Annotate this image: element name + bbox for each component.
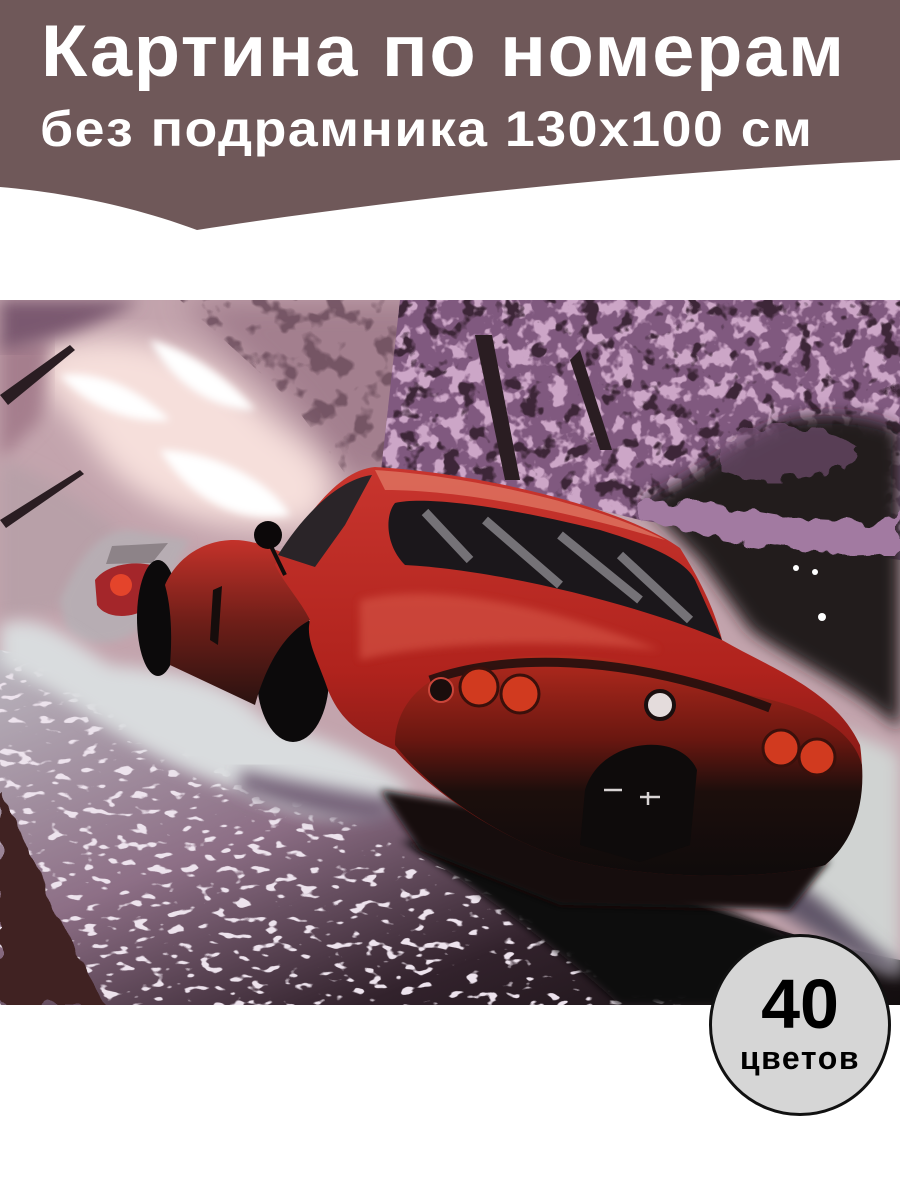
deck highlight [360, 594, 660, 660]
number 40: 40 [761, 965, 839, 1043]
plate marks [604, 790, 660, 805]
badge [646, 691, 674, 719]
smoke [0, 621, 900, 975]
side window [278, 475, 372, 567]
wheels [137, 560, 329, 742]
front fender and door [165, 540, 345, 705]
black spoiler line [430, 662, 770, 708]
painting: red car on a road under cherry blossoms [0, 300, 900, 1005]
label: цветов [740, 1040, 860, 1076]
rear panel [395, 655, 862, 876]
red car [137, 467, 862, 910]
badge: 40 colours [709, 934, 891, 1116]
mirror [268, 540, 285, 575]
background trees [0, 300, 900, 1005]
second car [60, 530, 190, 643]
header banner [0, 0, 900, 230]
roof highlight [375, 470, 665, 540]
licence plate area [580, 745, 697, 862]
road [0, 650, 900, 1005]
rear window [388, 501, 722, 640]
title: Картина по номерам [41, 11, 846, 92]
door handle recess [210, 586, 222, 645]
shadow [380, 790, 830, 910]
tail lights [460, 668, 498, 706]
roof and main body [275, 467, 862, 876]
subtitle: без подрамника 130х100 см [40, 100, 813, 157]
